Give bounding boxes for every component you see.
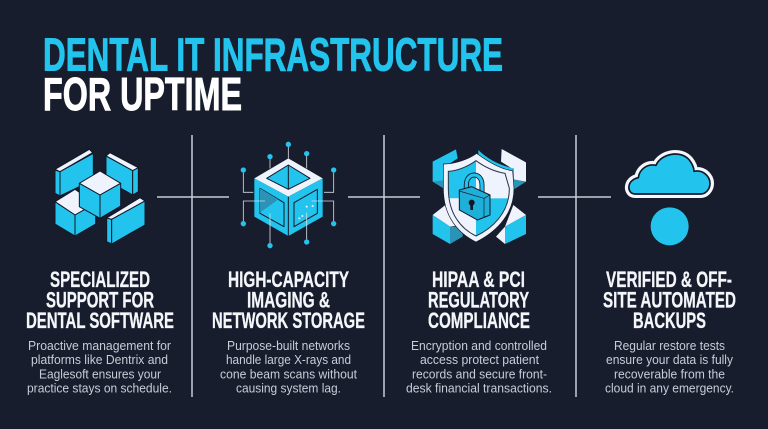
text: regulatory compliance description: access protect patient [420,352,539,367]
heading: imaging and storage: NETWORK STORAGE [212,308,365,333]
text: automated backups description: recoverable from the [614,366,725,382]
text: imaging and storage description [220,338,357,396]
heading: imaging and storage: HIGH-CAPACITY [228,267,349,292]
text: regulatory compliance description [406,338,552,396]
text: specialized support description [27,338,172,396]
text: imaging and storage description: causing system lag. [236,380,341,396]
heading: specialized support: SPECIALIZED [50,267,150,292]
icon: server blocks [55,149,145,244]
title: FOR UPTIME [43,68,242,120]
heading: imaging and storage [212,267,365,333]
icon: security shield and padlock [433,149,526,244]
text: regulatory compliance description: records and secure front- [412,366,547,382]
heading: regulatory compliance [428,267,530,333]
heading: regulatory compliance: COMPLIANCE [428,308,530,333]
text: regulatory compliance description: Encryption and controlled [411,338,547,353]
text: imaging and storage description: Purpose-built networks [227,338,350,353]
text: imaging and storage description: handle large X-rays and [226,352,351,367]
text: specialized support description: practice stays on schedule. [27,380,172,396]
heading: imaging and storage: IMAGING & [247,288,330,312]
text: specialized support description: platforms like Dentrix and [31,352,168,367]
heading: automated backups: BACKUPS [633,308,706,333]
heading: automated backups [603,267,736,333]
heading: specialized support [26,267,174,333]
text: specialized support description: Proactive management for [28,338,172,353]
text: automated backups description: ensure your data is fully [606,352,734,367]
text: automated backups description [605,338,734,396]
heading: specialized support: SUPPORT FOR [46,288,154,312]
icon: cloud backup [629,154,710,245]
heading: specialized support: DENTAL SOFTWARE [26,308,174,333]
text: regulatory compliance description: desk financial transactions. [406,380,552,396]
text: automated backups description: Regular restore tests [614,338,725,353]
text: specialized support description: Eaglesoft ensures your [39,366,162,382]
text: imaging and storage description: cone beam scans without [220,366,357,382]
icon: imaging storage cube [241,142,336,248]
text: automated backups description: cloud in any emergency. [605,380,734,396]
heading: regulatory compliance: HIPAA & PCI [432,267,525,292]
title: DENTAL IT INFRASTRUCTURE [43,28,503,80]
title [43,28,503,120]
heading: regulatory compliance: REGULATORY [428,288,529,312]
